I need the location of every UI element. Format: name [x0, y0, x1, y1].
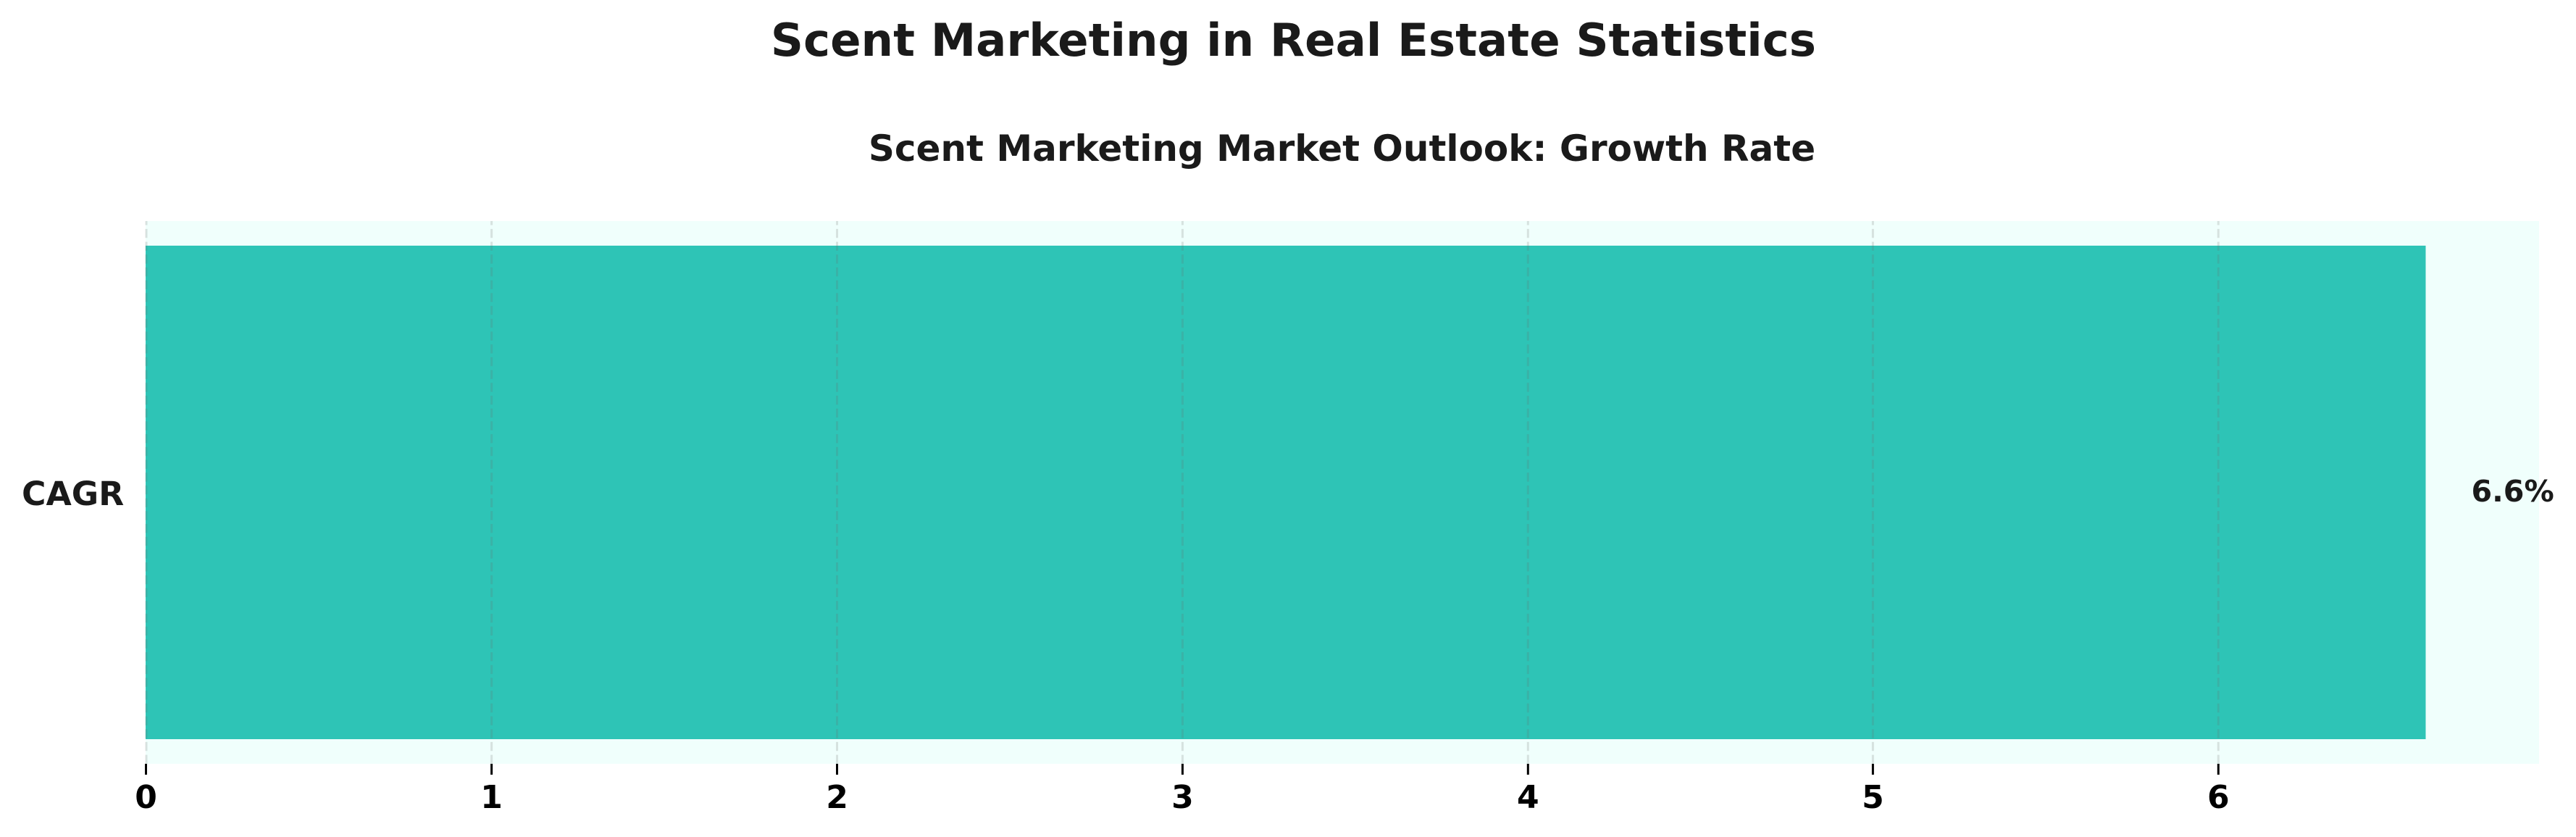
- chart subtitle: Scent Marketing Market Outlook: Growth Rate: [869, 128, 1815, 170]
- plot background: [146, 221, 2539, 764]
- bar value label: 6.6%: [2472, 474, 2554, 509]
- x-axis tick labels: 4: [1517, 779, 1539, 816]
- vertical grid lines: [146, 221, 2218, 764]
- x-axis tick labels: 3: [1171, 779, 1194, 816]
- y-axis category label: CAGR: [22, 475, 124, 513]
- bar chart: [22, 221, 2554, 816]
- x-axis tick marks: [146, 764, 2218, 775]
- bar: CAGR 6.6%: [146, 246, 2425, 739]
- x-axis tick labels: 0: [135, 779, 157, 816]
- x-axis tick labels: 2: [826, 779, 848, 816]
- title: Scent Marketing in Real Estate Statistics: [771, 14, 1816, 67]
- x-axis tick labels: 5: [1862, 779, 1884, 816]
- x-axis tick labels: [135, 779, 2230, 816]
- x-axis tick labels: 6: [2207, 779, 2230, 816]
- x-axis tick labels: 1: [480, 779, 503, 816]
